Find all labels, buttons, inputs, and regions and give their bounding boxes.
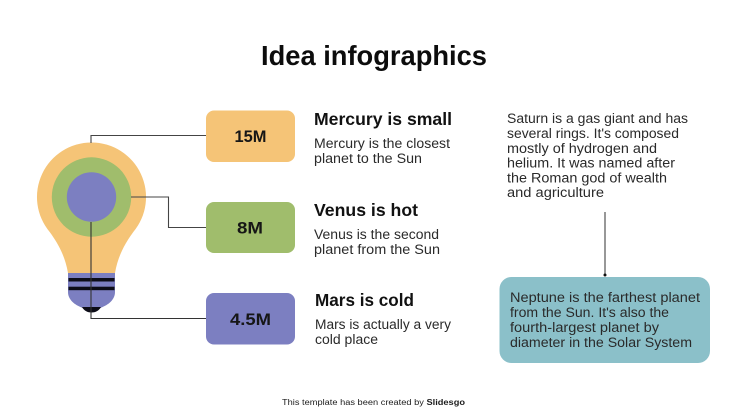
text block: Saturn: several rings. It's composed — [507, 126, 679, 141]
green ring — [52, 157, 131, 237]
panel: Venus value: 8M — [237, 220, 263, 238]
text block: Mars: Mars is cold — [315, 290, 414, 310]
bulb glass — [37, 142, 146, 273]
text block: Mercury: planet to the Sun — [314, 151, 422, 166]
text block: Mars: cold place — [315, 332, 378, 347]
connector: bulb to 15M — [91, 136, 207, 143]
text block: Mars — [315, 290, 451, 347]
connector: bulb to 8M — [131, 197, 207, 228]
purple core — [67, 172, 116, 222]
panel: Venus value — [206, 202, 295, 253]
footer credit: This template has been created by Slidesgo — [282, 398, 465, 407]
panel: Neptune callout: from the Sun. It's also the — [510, 305, 669, 320]
text block: Mercury: Mercury is small — [314, 109, 452, 129]
base stripes — [68, 278, 114, 312]
text block: Saturn: helium. It was named after — [507, 156, 676, 170]
panel: Neptune callout: Neptune is the farthest planet — [510, 290, 700, 305]
panel: Neptune callout — [500, 277, 710, 363]
text block: Saturn: the Roman god of wealth — [507, 170, 667, 186]
icon: light bulb — [37, 142, 146, 312]
text block: Venus — [314, 200, 440, 257]
panel: Neptune callout: fourth-largest planet by — [510, 320, 659, 335]
panel: Mars value: 4.5M — [230, 311, 271, 329]
panel: Neptune callout: diameter in the Solar System — [510, 335, 692, 350]
text block: Saturn: and agriculture — [507, 185, 604, 200]
text block: Venus: Venus is the second — [314, 227, 439, 242]
connector: bulb to 4.5M — [91, 222, 207, 318]
text block: Saturn: Saturn is a gas giant and has — [507, 111, 688, 126]
text block: Saturn: mostly of hydrogen and — [507, 141, 657, 156]
text block: Venus: planet from the Sun — [314, 242, 440, 257]
bulb base — [68, 273, 115, 308]
text block: Mercury: Mercury is the closest — [314, 136, 450, 151]
panel: Mercury value: 15M — [234, 128, 266, 146]
panel: Mars value — [206, 293, 295, 344]
text block: Venus: Venus is hot — [314, 200, 418, 220]
text block: Mars: Mars is actually a very — [315, 317, 451, 332]
text block: Saturn — [507, 111, 688, 200]
text block: Mercury — [314, 109, 452, 166]
arrow: Saturn to Neptune — [604, 212, 606, 276]
panel: Mercury value — [206, 110, 295, 162]
title: Idea infographics — [261, 40, 487, 71]
